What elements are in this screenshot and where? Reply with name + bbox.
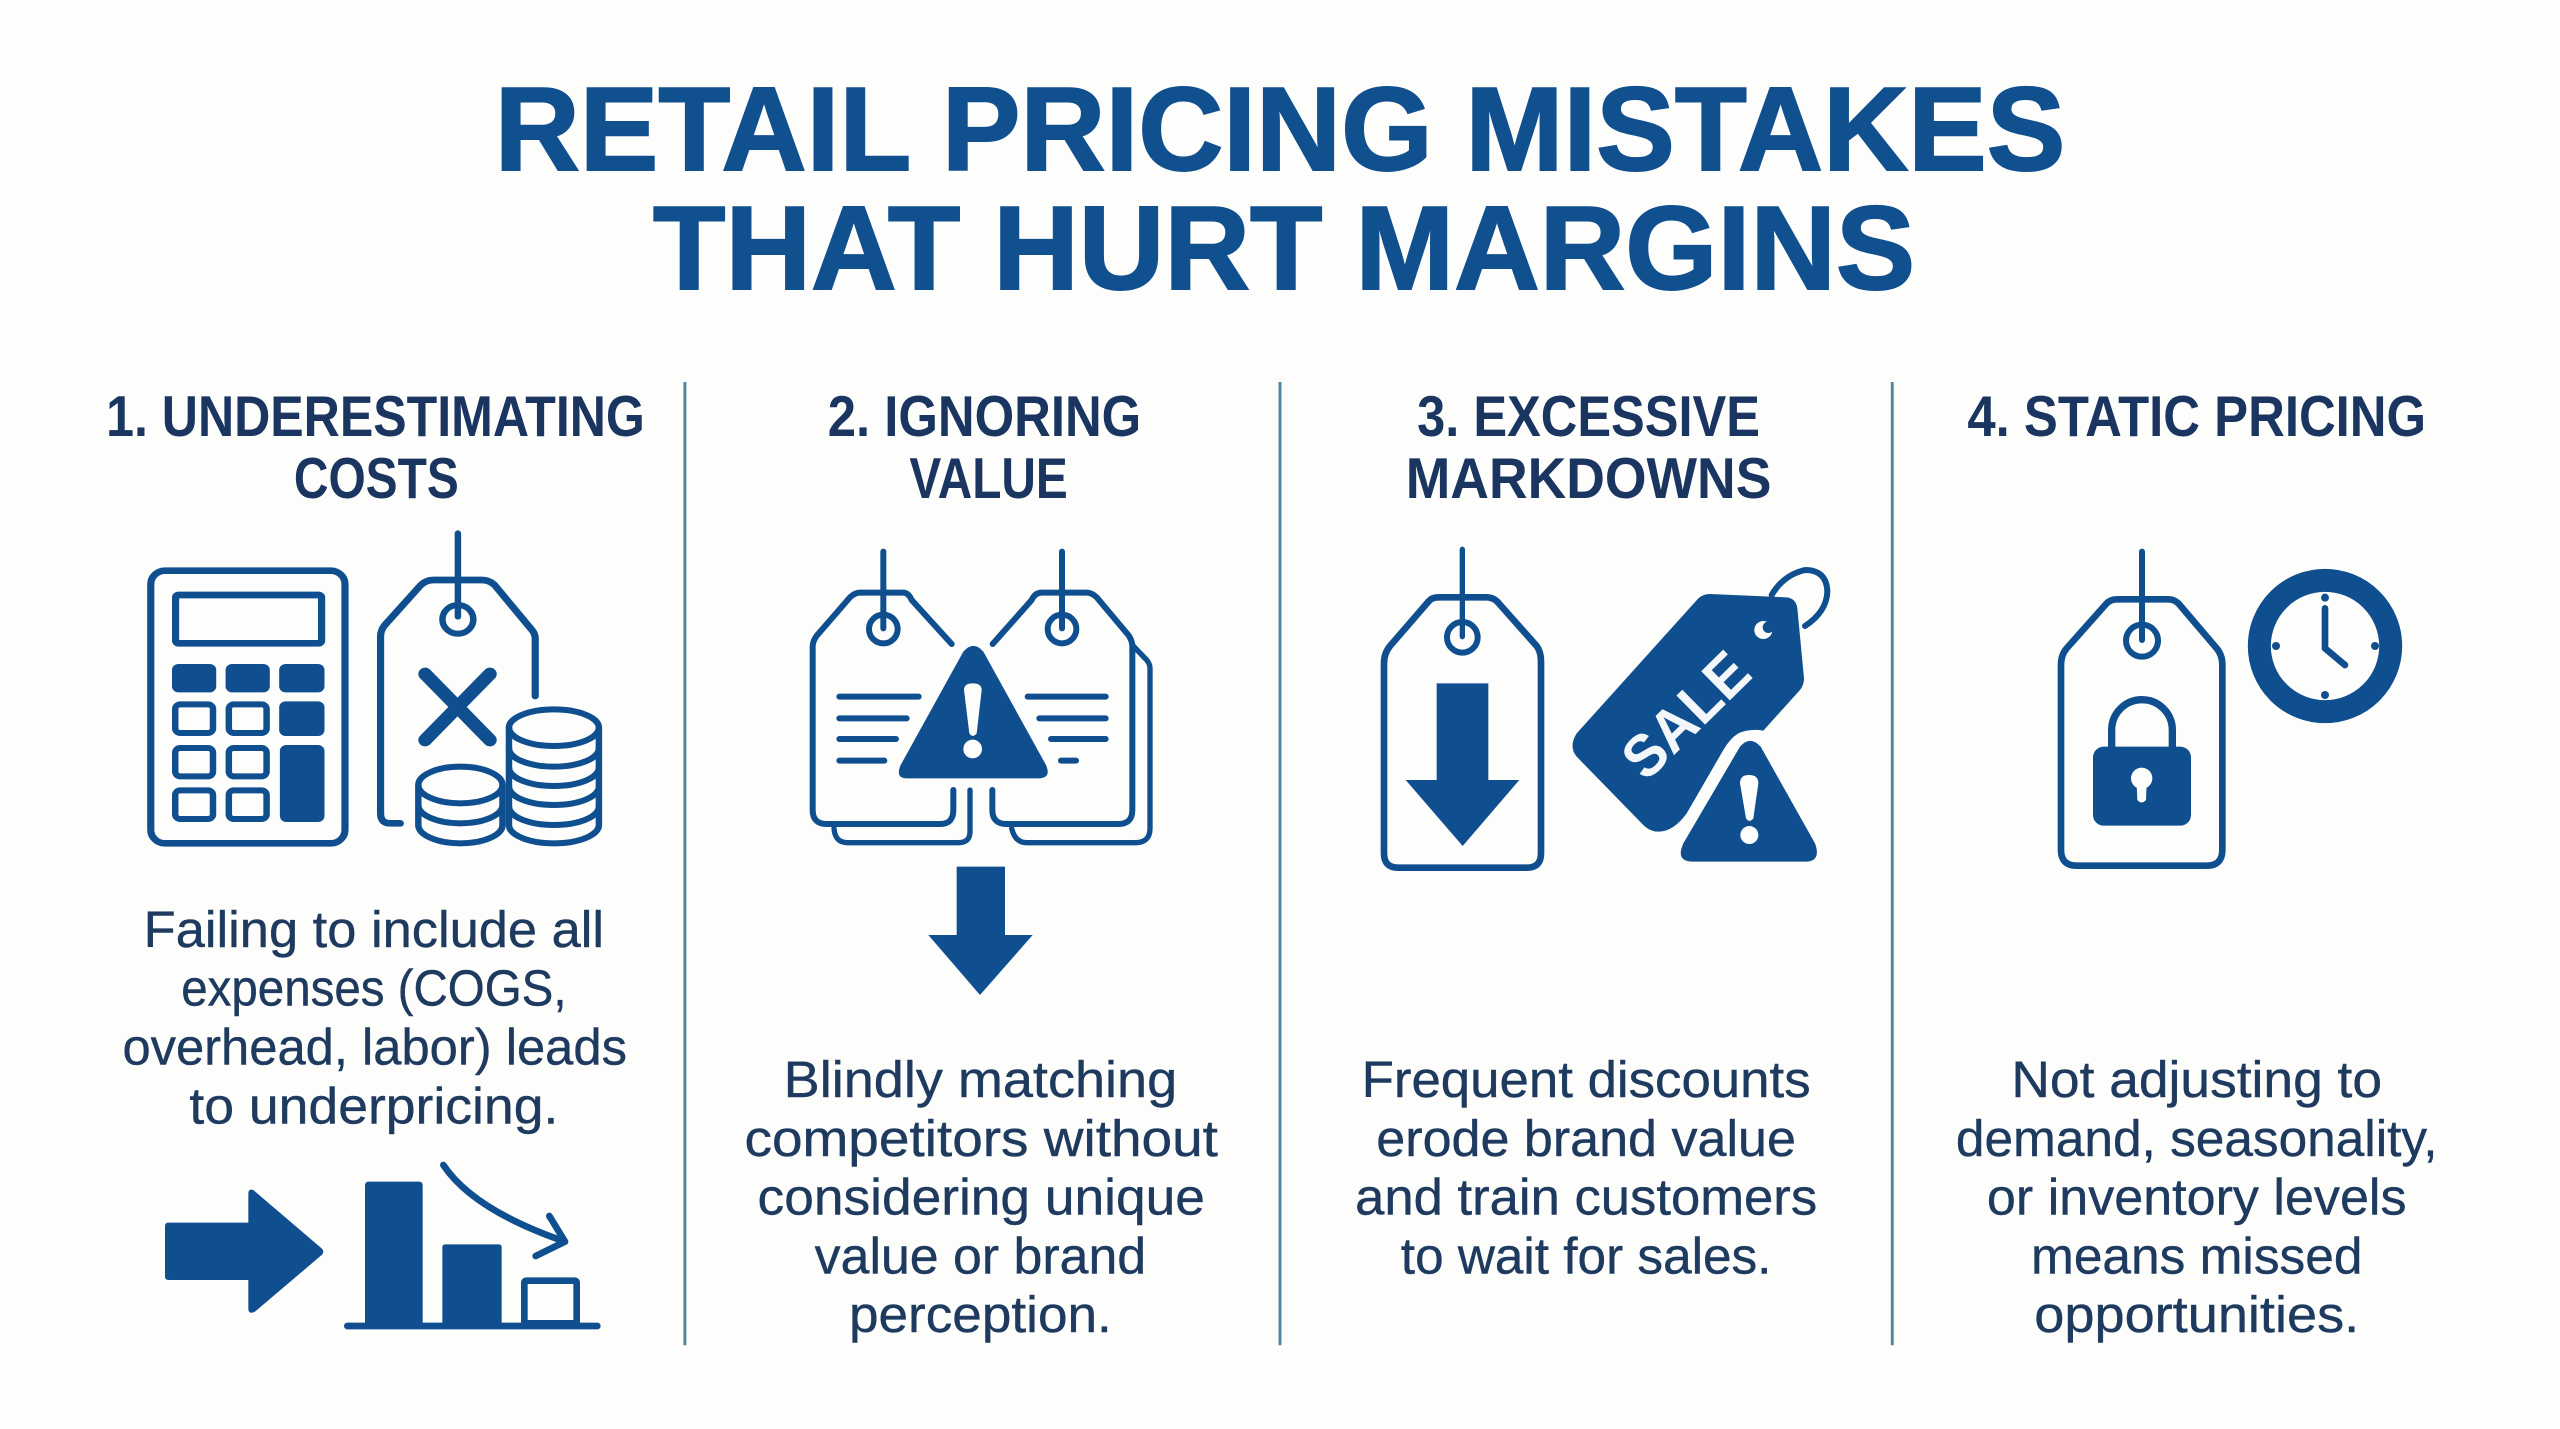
icon: clock (2259, 580, 2391, 712)
panel: static pricing (1956, 385, 2438, 1343)
title: THAT HURT MARGINS (653, 182, 1915, 315)
description: static pricing: or inventory levels (1987, 1168, 2407, 1226)
description: static pricing: demand, seasonality, (1956, 1109, 2438, 1167)
icon: two tags with warning triangle (813, 552, 1150, 843)
heading: excessive markdowns (1406, 385, 1771, 511)
icon: crossed price tag with coins (381, 533, 599, 843)
panel: ignoring value (744, 385, 1218, 1343)
description: underestimating costs: expenses (COGS, (181, 959, 567, 1017)
description: ignoring value: considering unique (758, 1168, 1205, 1226)
description: excessive markdowns: erode brand value (1376, 1109, 1796, 1167)
description: ignoring value: Blindly matching (784, 1050, 1177, 1108)
title: RETAIL PRICING MISTAKES (495, 63, 2065, 196)
panel: excessive markdowns (1355, 385, 1827, 1284)
description: ignoring value: competitors without (744, 1109, 1218, 1167)
description: static pricing: Not adjusting to (2011, 1050, 2382, 1108)
description: ignoring value (744, 1050, 1218, 1343)
description: static pricing (1956, 1050, 2438, 1343)
description: underestimating costs (122, 900, 627, 1134)
heading: ignoring value (828, 385, 1141, 511)
chart: declining margin bars (347, 1165, 597, 1327)
description: excessive markdowns: to wait for sales. (1401, 1226, 1771, 1284)
heading: excessive markdowns: MARKDOWNS (1406, 447, 1771, 511)
heading: underestimating costs (106, 385, 645, 511)
heading: ignoring value: VALUE (909, 447, 1068, 511)
icon: sale tag with warning: SALE (1608, 638, 1763, 792)
arrow: down (928, 867, 1033, 995)
heading: underestimating costs: 1. UNDERESTIMATING (106, 385, 645, 449)
heading: static pricing: 4. STATIC PRICING (1967, 385, 2426, 449)
heading: underestimating costs: COSTS (294, 447, 459, 511)
description: underestimating costs: Failing to include all (144, 900, 604, 958)
icon: calculator (151, 571, 345, 843)
panel: underestimating costs (106, 385, 645, 1327)
icon: sale tag with warning (1573, 570, 1827, 862)
description: static pricing: opportunities. (2034, 1285, 2359, 1343)
title (495, 63, 2065, 315)
heading: ignoring value: 2. IGNORING (828, 385, 1141, 449)
description: static pricing: means missed (2031, 1226, 2362, 1284)
description: excessive markdowns: Frequent discounts (1362, 1050, 1811, 1108)
description: underestimating costs: to underpricing. (189, 1076, 558, 1134)
description: ignoring value: value or brand (815, 1226, 1146, 1284)
description: underestimating costs: overhead, labor) leads (122, 1017, 627, 1075)
description: ignoring value: perception. (849, 1285, 1112, 1343)
description: excessive markdowns (1355, 1050, 1817, 1284)
icon: right arrow (165, 1190, 323, 1313)
description: excessive markdowns: and train customers (1355, 1168, 1817, 1226)
icon: price tag with down arrow (1384, 549, 1541, 868)
heading: excessive markdowns: 3. EXCESSIVE (1417, 385, 1760, 449)
icon: price tag with padlock (2061, 552, 2222, 866)
